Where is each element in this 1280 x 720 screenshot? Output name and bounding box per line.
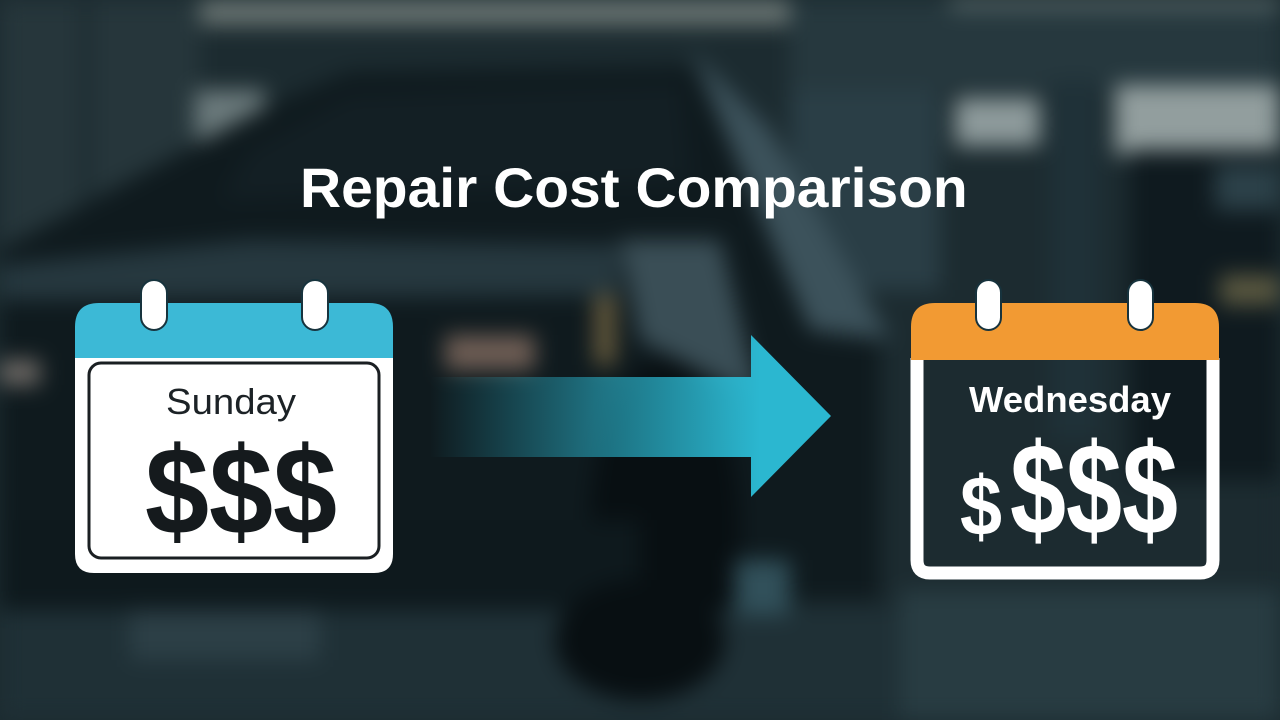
title: Repair Cost Comparison bbox=[300, 156, 968, 219]
calendar: Wednesday: $ bbox=[960, 459, 1002, 553]
calendar: Sunday: Sunday bbox=[166, 381, 296, 422]
calendar: Wednesday: $$$ bbox=[1010, 416, 1178, 562]
calendar: Sunday: $$$ bbox=[145, 423, 337, 561]
calendar: Wednesday: Wednesday bbox=[969, 379, 1171, 420]
